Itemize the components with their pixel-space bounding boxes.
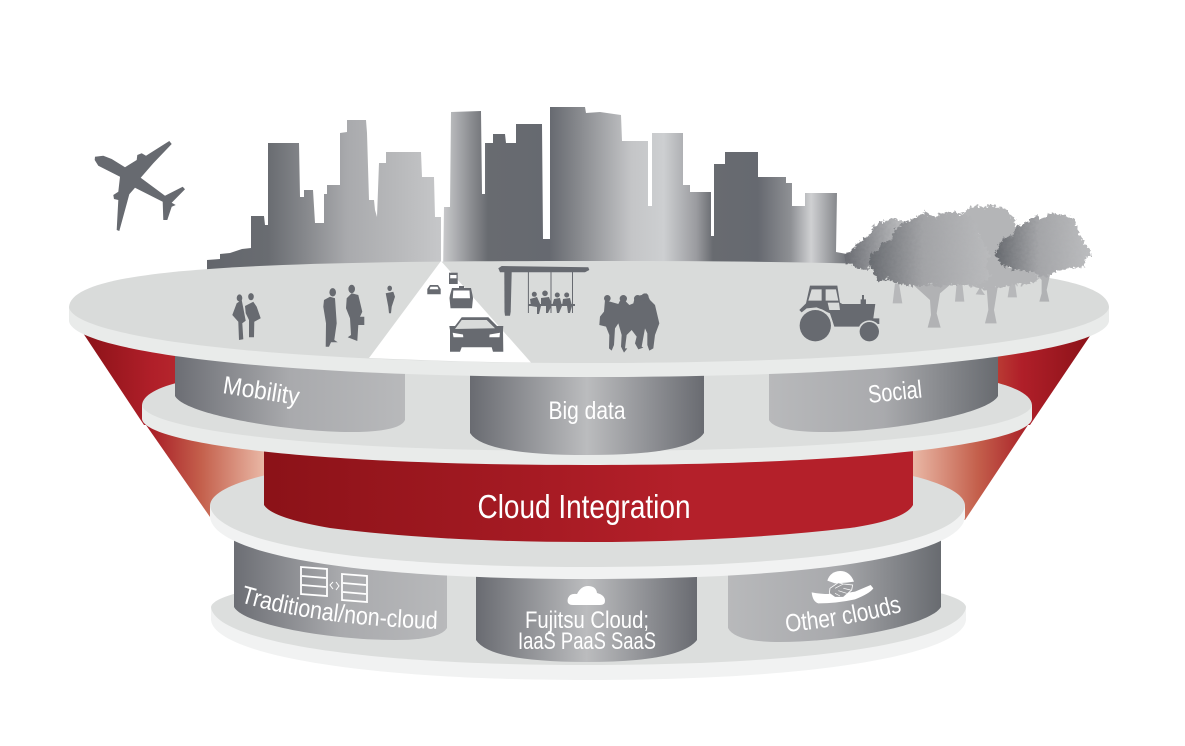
icon: tractor — [798, 286, 881, 343]
red funnel upper sections — [83, 333, 1092, 425]
base disc — [211, 570, 966, 680]
cylinder: other clouds — [728, 540, 941, 642]
trees — [845, 204, 1092, 328]
icon: cloud — [568, 586, 605, 605]
icon: handshake in clouds — [812, 571, 873, 603]
back tree trunks — [893, 283, 1017, 303]
cylinder: traditional/non-cloud — [234, 540, 447, 640]
person: walking — [386, 286, 395, 313]
cylinder: big data — [470, 360, 704, 455]
label: big data: Big data — [548, 397, 626, 425]
front tree left — [869, 212, 991, 328]
vehicle: small car — [427, 285, 441, 294]
label: traditional/non-cloud: Traditional/non-cloud — [244, 586, 437, 629]
vehicle: truck — [449, 273, 458, 284]
back tree middle — [955, 204, 1040, 323]
people: couple — [232, 293, 261, 340]
top disc — [69, 261, 1109, 377]
cylinder: fujitsu cloud — [476, 520, 697, 662]
icon: linked servers — [301, 567, 367, 602]
red funnel lower sections — [146, 425, 1028, 520]
label: other clouds: Other clouds — [786, 596, 901, 632]
vehicle: bus — [450, 286, 473, 308]
cylinder: mobility — [175, 340, 405, 432]
second disc — [142, 360, 1032, 465]
label: fujitsu cloud: Fujitsu Cloud; — [525, 607, 649, 634]
vehicle: car — [449, 317, 503, 352]
city skyline right — [443, 107, 860, 285]
label: mobility: Mobility — [221, 371, 302, 411]
label: cloud integration: Cloud Integration — [478, 488, 690, 525]
road — [369, 261, 531, 362]
people: two businessmen — [323, 285, 364, 347]
label: social: Social — [867, 375, 923, 409]
middle disc — [210, 451, 965, 579]
front tree right — [995, 213, 1092, 302]
label: iaas paas saas: IaaS PaaS SaaS — [518, 628, 656, 655]
city skyline left — [207, 120, 441, 275]
people: group of women — [599, 293, 659, 353]
bus stop shelter — [498, 266, 589, 316]
cylinder: social — [769, 340, 998, 432]
waiting people — [530, 290, 572, 314]
icon: airplane — [95, 141, 185, 231]
band: cloud integration — [264, 440, 913, 542]
back tree left — [845, 218, 908, 271]
